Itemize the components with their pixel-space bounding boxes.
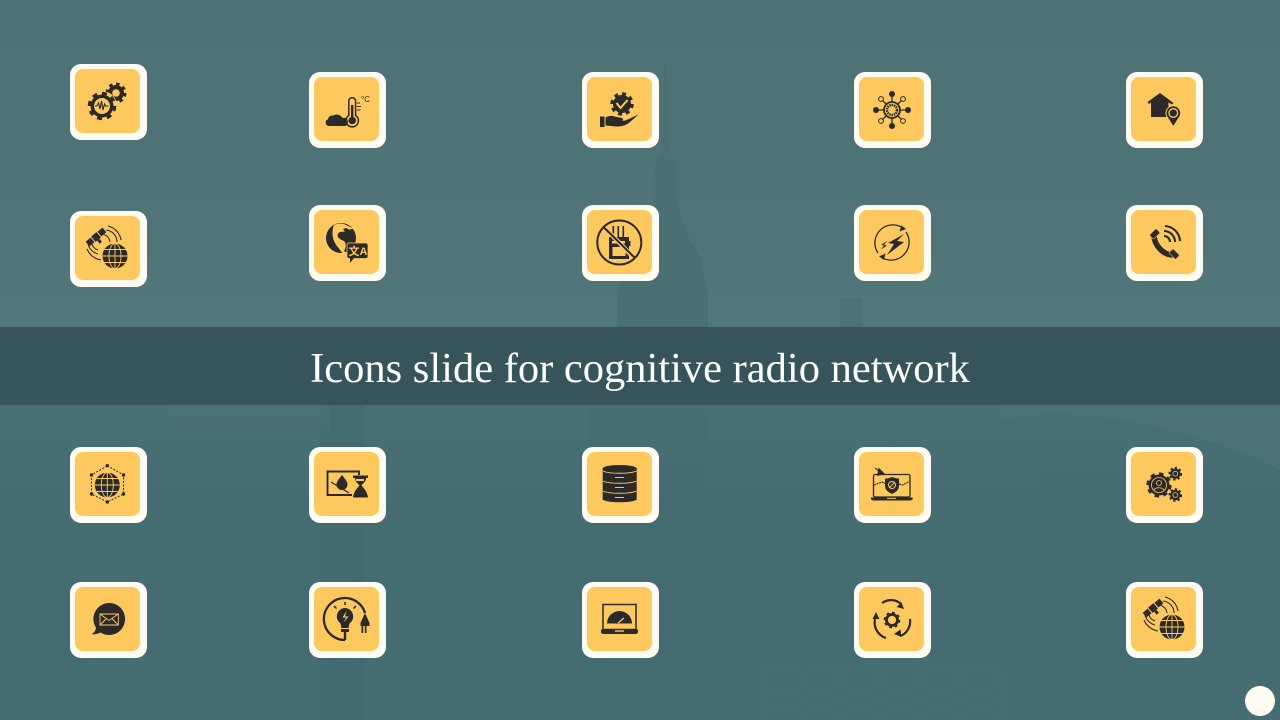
icon tile: globe with translation bubble: 文A (348, 244, 367, 258)
icon tile: gear with rotating arrows (854, 582, 931, 658)
icon tile: prohibited radio device (582, 205, 659, 281)
icon tile: house with location pin (1126, 72, 1203, 148)
icon tile: globe with translation bubble (309, 205, 386, 281)
icon tile: globe in dashed hexagon (70, 447, 147, 523)
icon tile: cloud and thermometer (309, 72, 386, 148)
icon tile: laptop with shield and chain (854, 447, 931, 523)
icon tile: satellite and globe (repeat) (1126, 582, 1203, 658)
title band (0, 327, 1280, 405)
icon tile: database cylinder (582, 447, 659, 523)
page number circle (1245, 686, 1275, 716)
icon tile: chat bubble with envelope (70, 582, 147, 658)
icon tile: light bulb with plug cord (309, 582, 386, 658)
icon tile: cloud and thermometer: °C (361, 95, 370, 104)
icon tile: network hub with gear (854, 72, 931, 148)
icon tile: laptop with speedometer (582, 582, 659, 658)
icon tile: satellite and globe (70, 211, 147, 287)
icon tile: hand holding gear with check (582, 72, 659, 148)
icon tile: three gears with person (1126, 447, 1203, 523)
icon tile: energy bolt with cycle arrows (854, 205, 931, 281)
title: Icons slide for cognitive radio network (310, 345, 970, 392)
icon tile: chart with drop and hourglass (309, 447, 386, 523)
icon tile: phone call with signal waves (1126, 205, 1203, 281)
icon tile: gears with waveform (70, 64, 147, 140)
